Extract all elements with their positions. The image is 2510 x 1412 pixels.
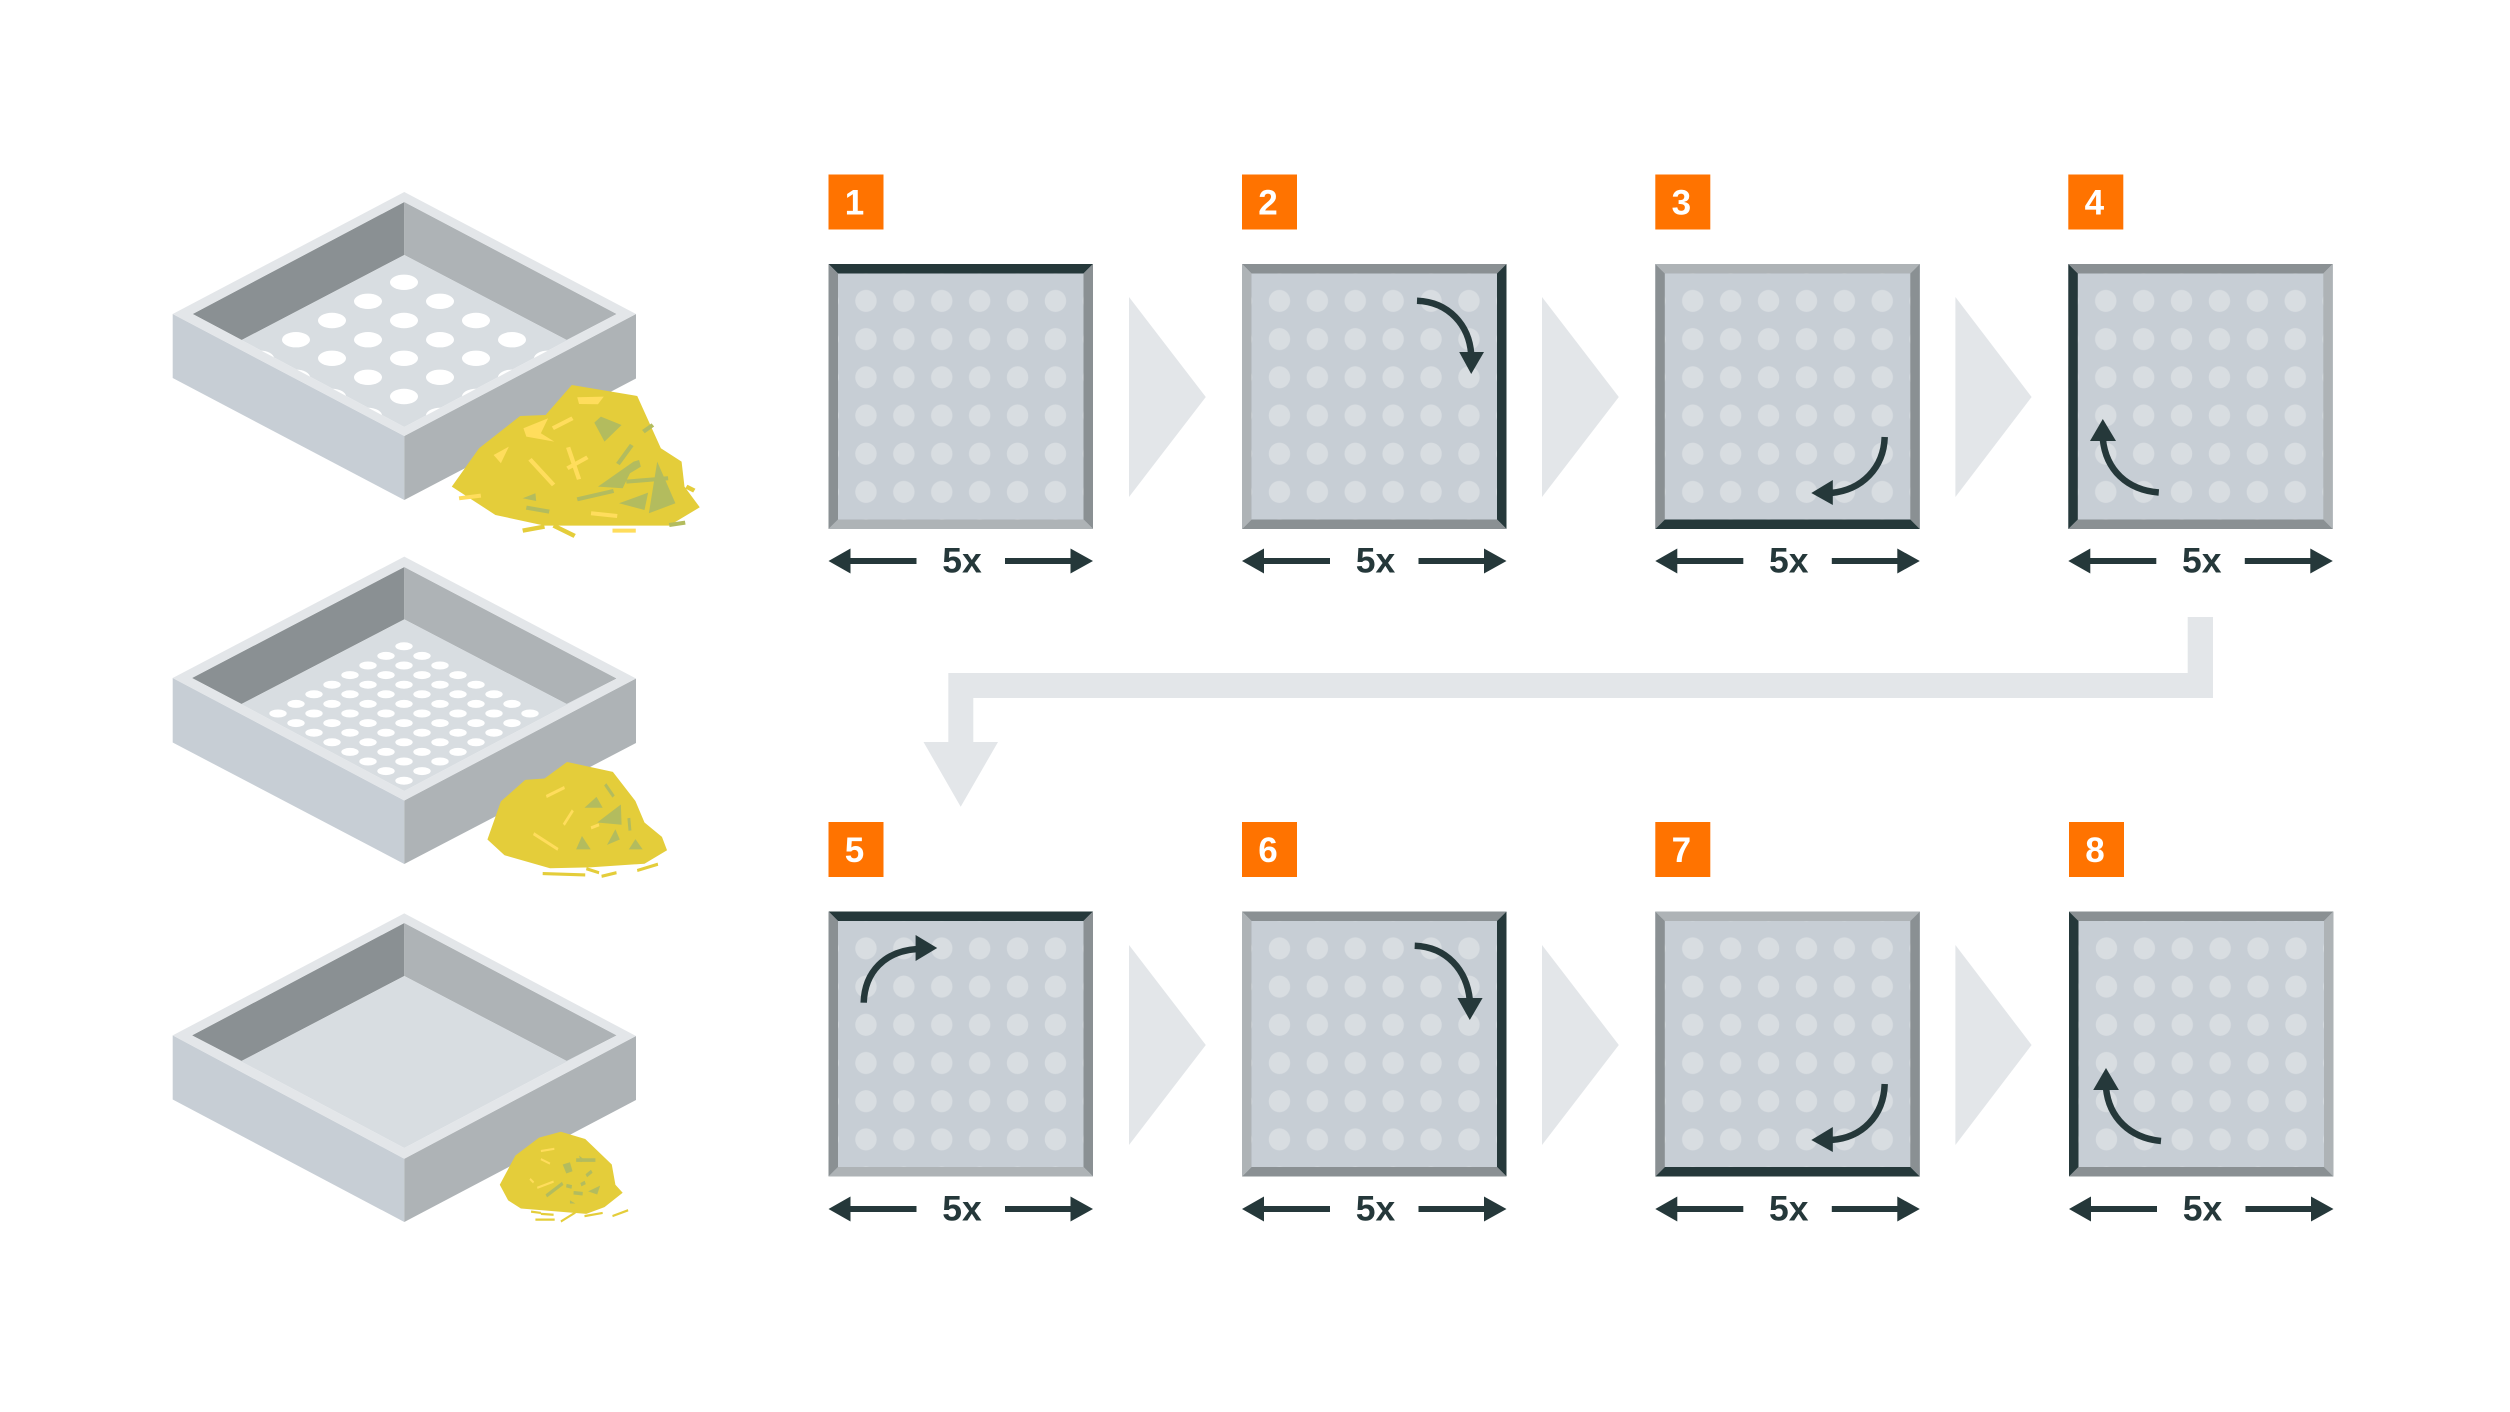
5x double arrow 7: 5x: [1769, 1188, 1809, 1228]
panel 3: bottom edge dark: [1655, 264, 1920, 529]
badge 3: [1655, 174, 1710, 230]
5x double arrow 8: [2069, 1188, 2334, 1228]
badge 1: [828, 174, 884, 230]
panel 5: top edge dark: [828, 912, 1093, 1176]
panel 7: bottom edge dark: [1655, 912, 1920, 1176]
5x double arrow 6: 5x: [1356, 1188, 1395, 1228]
step 3: [1655, 174, 1920, 580]
5x double arrow 1: [828, 540, 1093, 580]
arrow: connector from step 4 to step 5: [924, 617, 2213, 807]
badge 4: 4: [2085, 184, 2105, 222]
panel 6: right edge dark: [1242, 912, 1506, 1176]
panel 8: left edge dark: [2069, 912, 2334, 1176]
5x double arrow 3: [1655, 540, 1920, 580]
curved arrow: clockwise 2: [1417, 301, 1484, 374]
arrow: step 6 to 7: [1542, 945, 1619, 1145]
icon: large hay pile: [452, 385, 700, 536]
badge 7: 7: [1672, 831, 1691, 870]
badge 5: [828, 822, 884, 877]
panel 2: right edge dark: [1242, 264, 1506, 529]
badge 2: [1242, 174, 1297, 230]
5x double arrow 7: [1655, 1188, 1920, 1228]
step 1: [828, 174, 1093, 580]
badge 8: [2069, 822, 2124, 877]
5x double arrow 6: [1242, 1188, 1506, 1228]
badge 7: [1655, 822, 1710, 877]
badge 1: 1: [845, 184, 864, 222]
badge 8: 8: [2085, 831, 2105, 870]
5x double arrow 1: 5x: [942, 540, 982, 580]
5x double arrow 2: 5x: [1356, 540, 1395, 580]
step 2: [1242, 174, 1506, 580]
curved arrow: clockwise 4: [2090, 419, 2159, 492]
arrow: step 2 to 3: [1542, 297, 1619, 497]
badge 6: [1242, 822, 1297, 877]
5x double arrow 5: 5x: [942, 1188, 982, 1228]
curved arrow: clockwise 3: [1811, 437, 1885, 505]
arrow: step 3 to 4: [1955, 297, 2032, 497]
5x double arrow 3: 5x: [1769, 540, 1809, 580]
step 6: [1242, 822, 1506, 1228]
step 5: [828, 822, 1093, 1228]
step 7: [1655, 822, 1920, 1228]
badge 5: 5: [845, 831, 864, 870]
step 4: [2068, 174, 2333, 580]
badge 3: 3: [1672, 184, 1691, 222]
arrow: step 1 to 2: [1129, 297, 1206, 497]
arrow: step 7 to 8: [1955, 945, 2032, 1145]
curved arrow: clockwise 7: [1811, 1084, 1885, 1152]
5x double arrow 2: [1242, 540, 1506, 580]
step 8: [2069, 822, 2334, 1228]
curved arrow: clockwise 8: [2093, 1068, 2161, 1141]
badge 2: 2: [1258, 184, 1278, 222]
5x double arrow 8: 5x: [2183, 1188, 2222, 1228]
5x double arrow 4: [2068, 540, 2333, 580]
badge 6: 6: [1258, 831, 1278, 870]
badge 4: [2068, 174, 2123, 230]
5x double arrow 5: [828, 1188, 1093, 1228]
curved arrow: clockwise 6: [1415, 946, 1483, 1020]
icon: small hay pile: [500, 1132, 628, 1221]
icon: empty tray: [173, 913, 636, 1222]
arrow: step 5 to 6: [1129, 945, 1206, 1145]
panel 1: top edge dark: [828, 264, 1093, 529]
5x double arrow 4: 5x: [2182, 540, 2222, 580]
icon: tray with fine sieve: [173, 557, 636, 864]
panel 4: left edge dark: [2068, 264, 2333, 529]
icon: tray with coarse sieve and large hay pile: [173, 192, 636, 500]
curved arrow: clockwise 5: [864, 935, 937, 1003]
icon: medium hay pile: [487, 762, 667, 876]
